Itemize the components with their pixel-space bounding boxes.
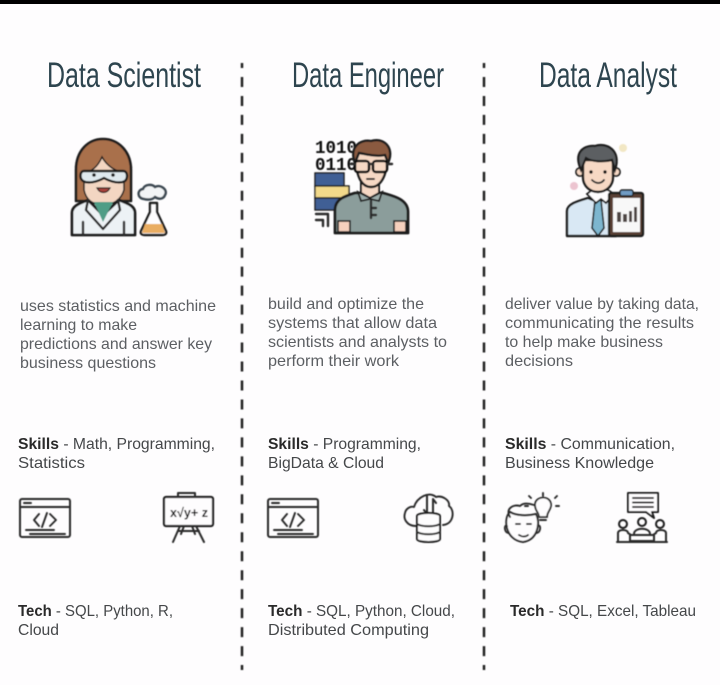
- text: data engineer skills: [268, 436, 421, 472]
- icon: math formula easel: [164, 493, 213, 542]
- icon: data analyst with clipboard: [567, 144, 643, 236]
- text: data engineer description: systems that allow data: [268, 315, 437, 332]
- icon: meeting with speech bubble: [617, 493, 667, 542]
- icon: person with idea bulb: [505, 493, 559, 542]
- text: data analyst description: decisions: [505, 353, 573, 370]
- text: data analyst tech: Tech - SQL, Excel, Tableau: [510, 603, 696, 620]
- text: data engineer description: build and optimize the: [268, 296, 424, 313]
- title: Data Scientist: Data Scientist: [47, 56, 201, 95]
- text: data scientist description: business questions: [20, 355, 156, 372]
- text: data analyst skills: Skills - Communication,: [505, 436, 675, 453]
- text: data analyst description: [505, 296, 699, 370]
- text: data analyst description: deliver value by taking data,: [505, 296, 699, 313]
- text: data engineer tech: [268, 603, 455, 639]
- text: data engineer description: [268, 296, 447, 370]
- text: data scientist skills: [18, 436, 215, 472]
- icon: code window: [20, 499, 70, 537]
- text: data scientist tech: Tech - SQL, Python, R,: [18, 603, 173, 620]
- text: data engineer skills: BigData & Cloud: [268, 455, 384, 472]
- title: Data Engineer: Data Engineer: [292, 56, 444, 95]
- text: data analyst description: communicating the results: [505, 315, 694, 332]
- text: data scientist description: [20, 298, 216, 372]
- icon: data engineer with servers: 1010: [315, 139, 357, 159]
- icon: code window: [268, 499, 318, 537]
- text: data engineer tech: Distributed Computing: [268, 622, 429, 639]
- text: data analyst description: to help make business: [505, 334, 663, 351]
- icon: data engineer with servers: [315, 139, 408, 233]
- text: data scientist description: predictions and answer key: [20, 336, 212, 353]
- icon: data engineer with servers: 0110: [315, 156, 357, 176]
- text: data engineer skills: Skills - Programming,: [268, 436, 421, 453]
- icon: data scientist with flask: [72, 139, 166, 235]
- text: data analyst skills: [505, 436, 675, 472]
- text: data scientist tech: Cloud: [18, 622, 59, 639]
- text: data scientist tech: [18, 603, 173, 639]
- text: data engineer tech: Tech - SQL, Python, Cloud,: [268, 603, 455, 620]
- text: data engineer description: perform their work: [268, 353, 400, 370]
- icon: math formula easel: x√y+ z: [170, 505, 208, 520]
- icon: cloud database: [404, 495, 453, 542]
- text: data scientist skills: Statistics: [18, 455, 85, 472]
- text: data scientist description: uses statistics and machine: [20, 298, 216, 315]
- text: data scientist description: learning to make: [20, 317, 137, 334]
- text: data scientist skills: Skills - Math, Programming,: [18, 436, 215, 453]
- text: data analyst skills: Business Knowledge: [505, 455, 654, 472]
- text: data engineer description: scientists and analysts to: [268, 334, 447, 351]
